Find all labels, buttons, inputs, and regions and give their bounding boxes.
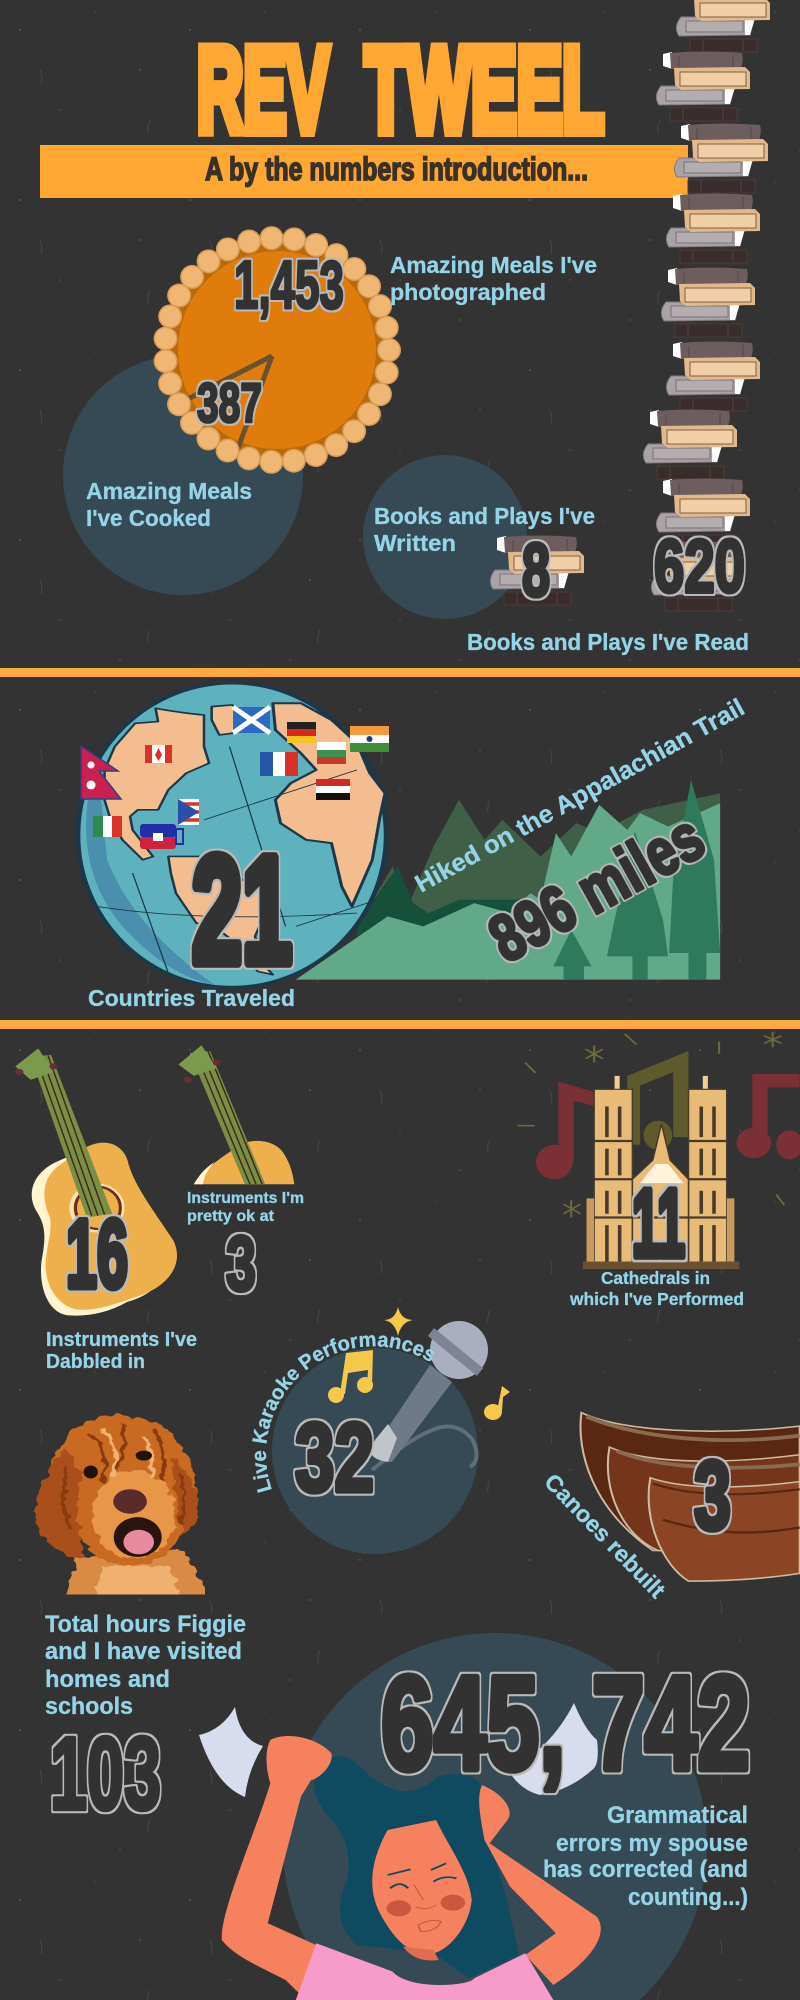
number: grammar errors: 645, 742 [381,1648,750,1798]
icon: globe with flags [78,683,389,987]
label: meals photographed: photographed [390,279,546,305]
number: canoes: 3 [694,1441,731,1550]
icon: guitar one [15,1048,177,1316]
label: canoes: Canoes rebuilt [539,1468,671,1603]
flag: France [260,752,298,776]
label: instruments ok at: Instruments I'm [187,1190,304,1207]
flag: Haiti [140,824,183,849]
label: meals cooked: Amazing Meals [86,478,252,504]
label: countries: Countries Traveled [88,985,295,1011]
number: cathedrals: 11 [632,1171,685,1277]
label: meals photographed: Amazing Meals I've [390,252,597,278]
label: instruments ok at: pretty ok at [187,1208,274,1225]
number: books written: 8 [522,528,550,612]
number: books read: 620 [654,525,745,608]
label: instruments dabbled: Dabbled in [46,1351,145,1373]
number: meals cooked: 387 [197,373,262,435]
icon: sparkle [384,1307,413,1336]
divider band top [0,668,800,677]
number: instruments dabbled: 16 [66,1200,128,1308]
number: countries: 21 [192,826,292,995]
number: karaoke: 32 [295,1404,374,1513]
label: cathedrals: Cathedrals in [601,1268,710,1288]
label: Figgie visits: Total hours Figgie [45,1611,246,1638]
label: Figgie visits: homes and [45,1666,170,1693]
label: Figgie visits: schools [45,1693,133,1720]
flag: Germany [287,722,316,743]
title bar [40,145,688,198]
number: instruments ok at: 3 [226,1222,256,1307]
icon: musical notes behind cathedral [518,1032,800,1218]
icon: canoes [580,1413,800,1581]
icon: mountains and trees [296,780,720,980]
number: meals photographed: 1,453 [234,248,344,323]
flag: Puerto Rico [178,799,199,825]
flag: Canada [145,745,172,763]
icon: frustrated woman [222,1736,601,2000]
flag: Egypt [316,779,350,800]
circle: cooked meals backdrop [63,355,303,595]
label: grammar errors: errors my spouse [556,1830,748,1857]
label: books written: Written [374,530,456,556]
label: books read: Books and Plays I've Read [467,629,749,655]
icon: single music note [484,1386,510,1420]
icon: flying paper left [199,1707,263,1797]
circle: karaoke backdrop [272,1348,478,1554]
label: Figgie visits: and I have visited [45,1638,242,1665]
label: instruments dabbled: Instruments I've [46,1329,197,1351]
label: grammar errors: Grammatical [607,1802,748,1829]
icon: pie chart of meals [165,238,389,462]
icon: dog Figgie [36,1416,214,1604]
flag: Nepal [81,746,121,799]
icon: tower of books read [643,0,770,611]
title: REV [197,24,329,158]
label: Appalachian Trail: Hiked on the Appalachian Trail [410,693,749,898]
flag: India [350,726,389,752]
label: books written: Books and Plays I've [374,503,595,529]
flag: Bulgaria [317,742,346,764]
flag: Scotland [233,707,270,733]
divider band bottom [0,1020,800,1029]
icon: flying paper right [508,1703,598,1795]
icon: microphone [369,1321,488,1470]
label: grammar errors: counting...) [628,1884,748,1911]
number: miles hiked: 896 miles [477,799,716,977]
icon: double music note [328,1350,373,1403]
icon: guitar two [178,1045,294,1184]
label: grammar errors: has corrected (and [543,1856,748,1883]
circle: books written backdrop [363,455,527,619]
number: hours visited: 103 [50,1716,161,1831]
title: TWEEL [365,24,604,158]
label: cathedrals: which I've Performed [569,1289,744,1309]
subtitle: A by the numbers introduction... [205,152,588,188]
circle: grammar backdrop [283,1633,707,2000]
label: karaoke curved: Live Karaoke Performances [252,1335,434,1493]
flag: Mexico [93,816,122,837]
label: meals cooked: I've Cooked [86,505,211,531]
icon: cathedral [583,1076,740,1269]
icon: books written stack [490,536,584,605]
